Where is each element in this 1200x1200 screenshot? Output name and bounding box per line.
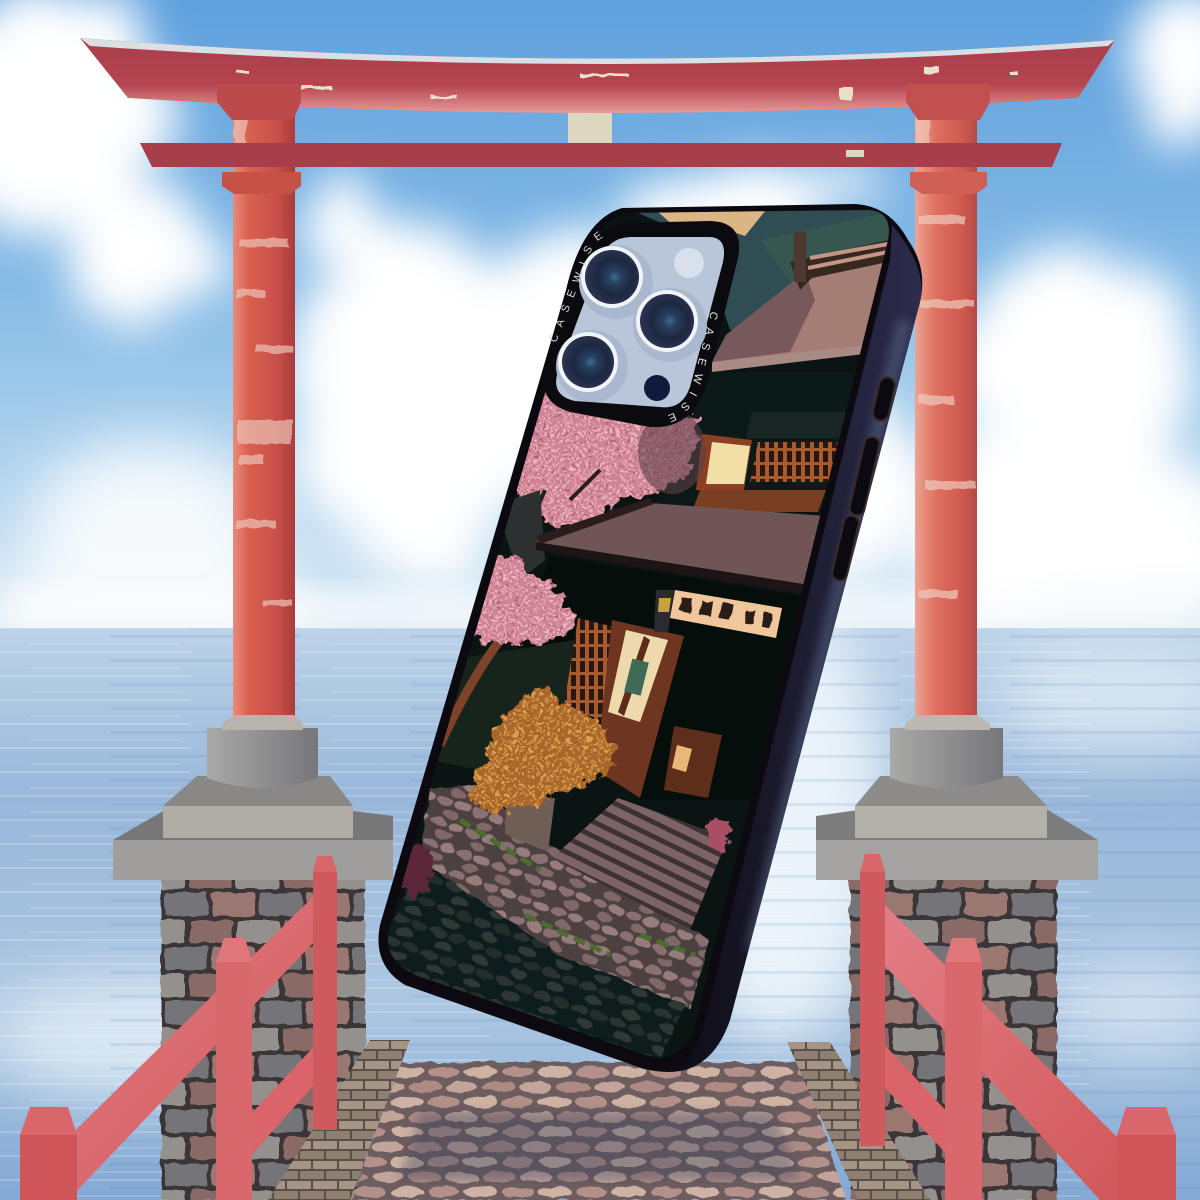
- microphone sensor: [644, 375, 670, 401]
- horizon haze: [0, 590, 1200, 630]
- cloud: upper right: [1115, 0, 1200, 135]
- flash: [674, 248, 704, 278]
- water glare: [0, 600, 1200, 1100]
- distant hills and sky: [638, 210, 889, 330]
- camera island: [545, 221, 740, 428]
- right pillar: [915, 100, 977, 720]
- lower roof: [496, 490, 826, 596]
- cloud: lower left haze: [0, 440, 300, 630]
- side buttons: [831, 376, 897, 582]
- sky background: [0, 0, 1200, 640]
- upper roof: [712, 232, 888, 372]
- hanging lantern: [654, 590, 674, 632]
- right pillar cap: [906, 84, 990, 120]
- lens: right: [633, 288, 707, 362]
- lower cherry tree: [440, 554, 575, 745]
- door with cream panels: [596, 620, 684, 798]
- cloud: upper left: [0, 0, 230, 315]
- lens: lower: [556, 330, 628, 402]
- left pillar collar: [222, 172, 301, 194]
- torii gate: [80, 38, 1115, 720]
- cloud: central bank: [290, 167, 920, 590]
- right stone base: [816, 715, 1098, 1200]
- tie beam: [140, 143, 1062, 167]
- phone case body: [378, 204, 922, 1072]
- sea: [0, 600, 1200, 1200]
- lattice window: [564, 618, 612, 720]
- right pillar collar: [910, 172, 987, 194]
- clouds: [0, 0, 1200, 630]
- left stone base: [113, 715, 393, 1200]
- stone path and stairs: [380, 785, 728, 1060]
- phone case artwork: [388, 210, 889, 1058]
- right railing: [860, 854, 1176, 1200]
- lower storefront: [438, 590, 722, 798]
- casewise ring text, upper left: CASEWISE: [550, 231, 603, 342]
- post box: [664, 726, 722, 798]
- cloud: right bank: [900, 252, 1200, 620]
- stone bridge deck: [268, 1040, 930, 1200]
- lens: top: [579, 245, 653, 319]
- left pillar: [233, 100, 295, 720]
- right side wall: [672, 225, 921, 1070]
- upper cherry tree: [509, 385, 706, 527]
- phone: [378, 204, 922, 1072]
- left pillar cap: [217, 84, 301, 120]
- left railing: [20, 856, 337, 1200]
- casewise ring text, lower right: CASEWISE: [668, 312, 718, 422]
- upper storey with window and balcony: [694, 412, 846, 512]
- central strut: [568, 103, 612, 143]
- camera plate: [556, 237, 724, 407]
- top beam: [80, 38, 1115, 113]
- orange shrub: [471, 686, 613, 811]
- hanging shop sign: [670, 590, 782, 638]
- small pink flowers: [400, 817, 730, 898]
